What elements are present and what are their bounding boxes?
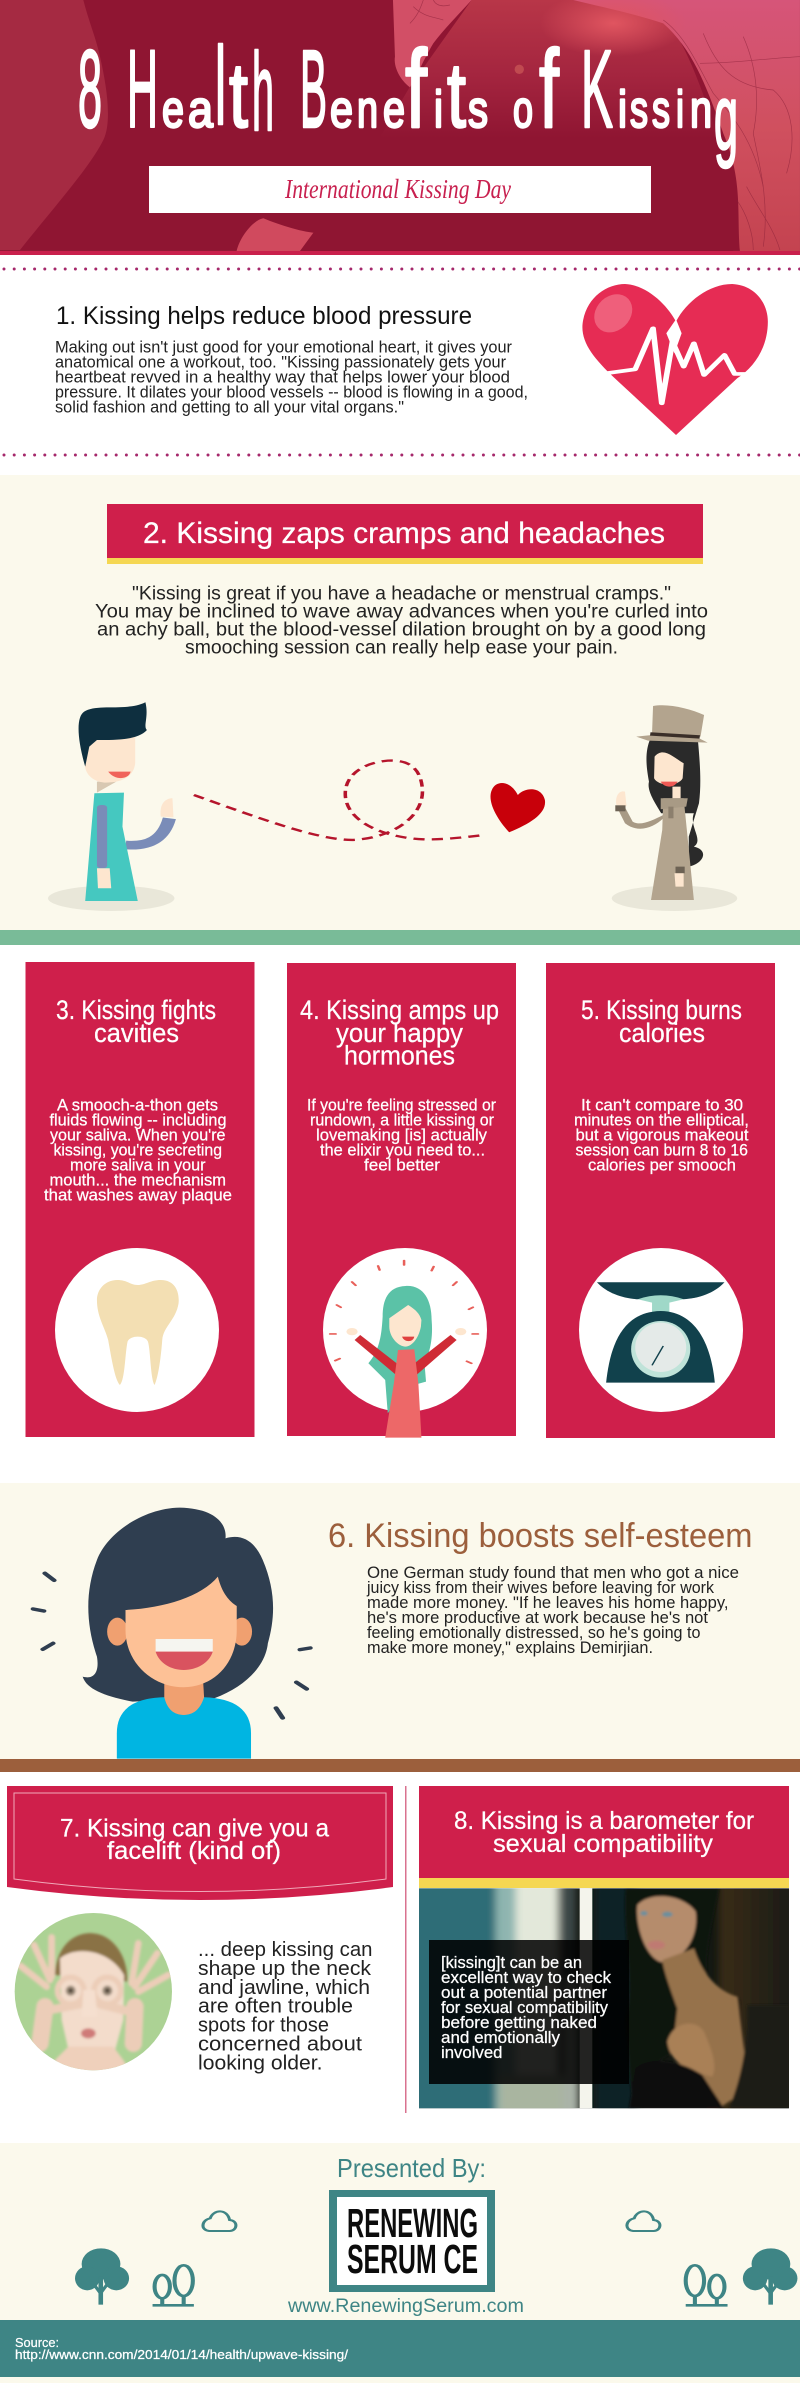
heading 1: 1. Kissing helps reduce blood pressure xyxy=(56,302,472,330)
body text 7: are often trouble xyxy=(198,1994,353,2018)
website: www.RenewingSerum.com xyxy=(287,2296,524,2317)
body text 3 xyxy=(44,1096,232,1204)
dashed heart trail xyxy=(194,761,485,840)
body text 7: looking older. xyxy=(198,2052,322,2074)
heading banner 2 xyxy=(107,504,703,564)
body text 5: It can't compare to 30 xyxy=(581,1096,743,1114)
body text 7 xyxy=(198,1938,372,2074)
body text 5: minutes on the elliptical, xyxy=(574,1112,749,1130)
body text 3: that washes away plaque xyxy=(44,1186,232,1204)
heading banner 7: facelift (kind of) xyxy=(107,1837,281,1865)
title: s xyxy=(652,81,670,139)
title: o xyxy=(513,81,533,139)
icon: left filled tree xyxy=(75,2248,129,2305)
source bar xyxy=(0,2320,800,2383)
source bar: Source: xyxy=(15,2335,59,2350)
heading 5: calories xyxy=(619,1018,705,1048)
body text 7: ... deep kissing can xyxy=(198,1938,372,1961)
icon: left cloud xyxy=(203,2211,236,2231)
presented by text: Presented By: xyxy=(337,2153,486,2183)
body text 6: feeling emotionally distressed, so he's going to xyxy=(367,1624,700,1642)
heading banner 8 xyxy=(419,1786,789,1888)
body text 4: lovemaking [is] actually xyxy=(316,1126,488,1144)
body text 6: made more money. "If he leaves his home happy, xyxy=(367,1594,728,1612)
title: B xyxy=(300,28,327,151)
body text 5: calories per smooch xyxy=(588,1156,736,1174)
heading 4 xyxy=(300,995,499,1070)
heading 3 xyxy=(56,995,216,1048)
body text 4 xyxy=(307,1096,496,1174)
decorative trees and clouds xyxy=(75,2211,797,2305)
body text 3: more saliva in your xyxy=(70,1156,206,1174)
title: H xyxy=(127,28,158,151)
heading 4: your happy xyxy=(336,1018,463,1048)
body text 8: before getting naked xyxy=(441,2014,597,2032)
body text 8: excellent way to check xyxy=(441,1969,612,1987)
photo: woman portrait xyxy=(419,1888,789,2108)
body text 2: smooching session can really help ease your pain. xyxy=(185,638,618,658)
icon: right cloud xyxy=(627,2211,660,2231)
title: i xyxy=(618,81,627,139)
body text 1: Making out isn't just good for your emotional heart, it gives your xyxy=(55,338,512,356)
illustration: man, heart path and woman xyxy=(48,702,737,911)
body text 1: heartbeat revved in a healthy way that helps lower your blood xyxy=(55,368,510,386)
header banner xyxy=(0,0,800,251)
title: e xyxy=(383,81,405,139)
heading 4: hormones xyxy=(344,1040,455,1070)
body text 8: for sexual compatibility xyxy=(441,1999,609,2017)
body text 7: concerned about xyxy=(198,2032,362,2056)
body text 3: your saliva. When you're xyxy=(50,1126,226,1144)
section 7: facelift xyxy=(7,1786,393,2077)
icon: heart with ECG line xyxy=(582,284,768,435)
body text 5: session can burn 8 to 16 xyxy=(576,1142,748,1160)
footer: presented by xyxy=(0,2143,800,2320)
title: f xyxy=(539,28,559,151)
body text 6: juicy kiss from their wives before leaving for work xyxy=(366,1579,715,1597)
panel: card 5 calories xyxy=(546,963,775,1438)
icon: tooth xyxy=(97,1280,179,1385)
heading 4: 4. Kissing amps up xyxy=(300,995,499,1025)
body text 2: an achy ball, but the blood-vessel dilation brought on by a good long xyxy=(97,620,706,640)
heading banner 7: 7. Kissing can give you a xyxy=(60,1814,329,1842)
panel: card 3 cavities xyxy=(26,962,254,1437)
title: n xyxy=(357,81,378,139)
body text 5: but a vigorous makeout xyxy=(576,1126,749,1144)
header banner: g xyxy=(714,67,738,169)
subtitle band xyxy=(149,166,651,213)
section 2: cramps and headaches xyxy=(0,475,800,930)
body text 8: and emotionally xyxy=(441,2029,561,2047)
body text 1: pressure. It dilates your blood vessels -- blood is flowing in a good, xyxy=(55,384,528,402)
body text 4: If you're feeling stressed or xyxy=(307,1096,496,1114)
heading 3: 3. Kissing fights xyxy=(56,995,216,1025)
logo: RENEWING xyxy=(347,2200,478,2246)
body text 2: "Kissing is great if you have a headache or menstrual cramps." xyxy=(132,584,671,604)
body text 7: and jawline, which xyxy=(198,1976,370,1999)
title: a xyxy=(188,81,213,139)
title: t xyxy=(229,45,248,147)
body text 2: You may be inclined to wave away advances when you're curled into xyxy=(95,602,708,622)
body text 6: make more money," explains Demirjian. xyxy=(367,1639,653,1657)
heading banner 7 xyxy=(7,1786,393,1900)
title: s xyxy=(630,81,648,139)
body text 1 xyxy=(55,338,528,416)
heading banner 8: 8. Kissing is a barometer for xyxy=(454,1807,754,1835)
body text 3: kissing, you're secreting xyxy=(54,1142,222,1160)
heading banner 2: 2. Kissing zaps cramps and headaches xyxy=(143,517,665,550)
body text 4: the elixir you need to... xyxy=(320,1142,485,1160)
body text 8 xyxy=(441,1954,612,2062)
man figure xyxy=(48,702,174,911)
body text 1: anatomical one a workout, too. "Kissing passionately gets your xyxy=(55,354,506,372)
body text 6 xyxy=(366,1564,739,1657)
icon: right filled tree xyxy=(743,2248,797,2305)
body text 8: [kissing]t can be an xyxy=(441,1954,582,1972)
body text 3: fluids flowing -- including xyxy=(50,1112,226,1130)
title: s xyxy=(468,81,488,139)
title: e xyxy=(162,81,184,139)
body text 2 xyxy=(95,584,708,658)
title: l xyxy=(215,25,226,148)
title: t xyxy=(447,45,466,147)
body text 6: he's more productive at work because he's not xyxy=(367,1609,708,1627)
body text 4: feel better xyxy=(364,1156,441,1174)
body text 8: involved xyxy=(441,2044,502,2062)
icon: weighing scale xyxy=(597,1282,724,1383)
body text 7: spots for those xyxy=(198,2014,329,2036)
body text 6: One German study found that men who got a nice xyxy=(367,1564,739,1582)
heading 6: 6. Kissing boosts self-esteem xyxy=(328,1517,752,1555)
icon: red heart xyxy=(491,783,545,832)
photo: woman making finger goggles xyxy=(13,1910,173,2077)
heading 5 xyxy=(581,995,742,1048)
heading banner 8: sexual compatibility xyxy=(493,1830,714,1858)
title: 8 xyxy=(78,28,102,151)
icon: happy woman with raised arms xyxy=(330,1261,478,1438)
woman figure xyxy=(612,705,737,911)
title: i xyxy=(434,81,443,139)
title: f xyxy=(405,28,427,151)
body text 8: out a potential partner xyxy=(441,1984,608,2002)
panel: card 4 happy hormones xyxy=(287,963,516,1438)
body text 5 xyxy=(574,1096,749,1174)
title: h xyxy=(252,31,274,154)
heading 3: cavities xyxy=(94,1018,179,1048)
title: K xyxy=(581,28,613,151)
icon: left outline trees xyxy=(153,2265,194,2305)
body text 4: rundown, a little kissing or xyxy=(310,1112,494,1130)
body text 3: A smooch-a-thon gets xyxy=(57,1096,218,1114)
section 1: blood pressure xyxy=(55,284,768,435)
title: i xyxy=(676,81,684,139)
heading 5: 5. Kissing burns xyxy=(581,995,742,1025)
section 8: sexual compatibility xyxy=(406,1786,800,2118)
section 6: self-esteem xyxy=(0,1483,800,1759)
title xyxy=(78,25,738,169)
title: n xyxy=(690,81,712,139)
title: e xyxy=(330,81,353,139)
logo: SERUM CE xyxy=(347,2236,478,2282)
body text 3: mouth... the mechanism xyxy=(50,1172,226,1190)
logo xyxy=(329,2190,495,2292)
illustration: smiling woman xyxy=(33,1508,310,1759)
icon: right outline trees xyxy=(686,2265,728,2305)
subtitle band: International Kissing Day xyxy=(284,174,511,204)
body text 7: shape up the neck xyxy=(198,1957,372,1980)
header background photo xyxy=(0,0,800,251)
body text 1: solid fashion and getting to all your vital organs." xyxy=(55,398,404,416)
source bar: http://www.cnn.com/2014/01/14/health/upwave-kissing/ xyxy=(15,2347,348,2362)
